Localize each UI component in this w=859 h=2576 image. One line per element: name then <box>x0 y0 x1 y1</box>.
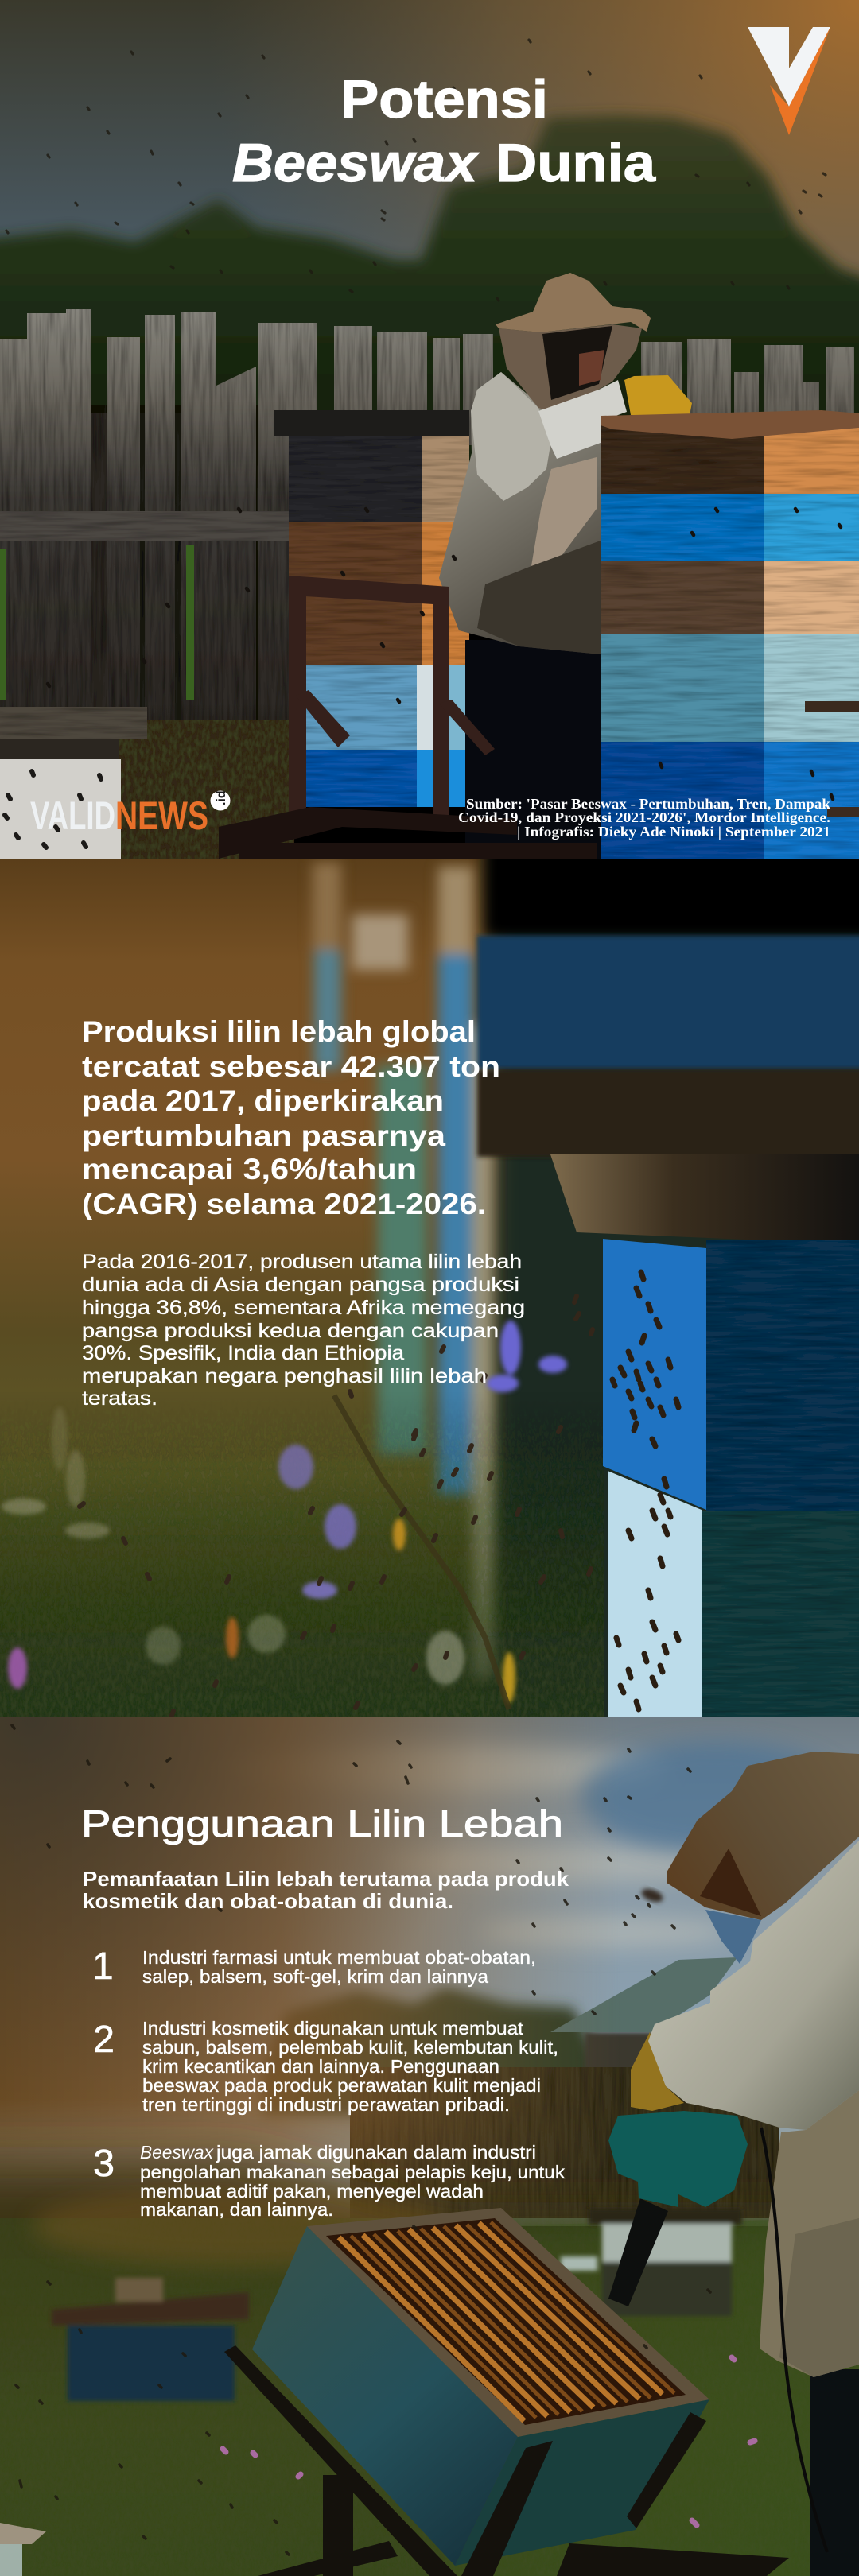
main statistic text: (CAGR) selama 2021-2026. <box>82 1188 486 1220</box>
raised sleeve <box>471 372 550 501</box>
bees in the sky and over the field <box>12 1725 710 2555</box>
sky background <box>0 0 859 280</box>
blue hive right face <box>706 1240 859 1511</box>
supporting paragraph: Pada 2016-2017, produsen utama lilin lebah <box>82 1251 522 1273</box>
title <box>232 69 656 193</box>
blue hive lit face <box>603 1239 706 1510</box>
list item 2: krim kecantikan dan lainnya. Penggunaan <box>142 2056 499 2077</box>
smoker nozzle <box>608 2198 668 2306</box>
supporting paragraph: dunia ada di Asia dengan pangsa produksi <box>82 1274 519 1296</box>
plant stem with bees <box>334 1395 509 1709</box>
farm building roof <box>550 1957 737 2032</box>
veil <box>705 1910 761 1964</box>
sunlit grass to the right <box>445 2218 859 2576</box>
rusty hive stand <box>219 576 597 859</box>
list item 3 <box>93 2142 566 2220</box>
supporting paragraph <box>82 1251 525 1410</box>
white glove sleeve <box>538 380 627 459</box>
blurred near bee <box>639 1887 665 1904</box>
hat <box>496 273 651 332</box>
upper coat and sleeve <box>648 1841 859 2130</box>
warm light overlay <box>0 1717 636 2322</box>
wooden fence background <box>350 2067 779 2218</box>
brown blurred band <box>477 1069 859 1157</box>
shadowed face <box>542 326 612 400</box>
veil <box>499 324 642 413</box>
top rim <box>307 2208 709 2437</box>
background hive left <box>52 2278 249 2401</box>
panel: hero section with beekeeper and hives <box>0 0 859 859</box>
top shading <box>0 1717 493 2163</box>
list item 2: sabun, balsem, pelembab kulit, kelembutan kulit, <box>142 2037 558 2058</box>
warm sun haze <box>285 0 859 281</box>
cloudy sky <box>0 1717 859 2226</box>
yellow glove <box>624 375 692 415</box>
supporting paragraph: merupakan negara penghasil lilin lebah <box>82 1365 487 1387</box>
dark frame cavity <box>326 2218 686 2425</box>
main statistic text: Produksi lilin lebah global <box>82 1015 476 1048</box>
list item 1: salep, balsem, soft-gel, krim dan lainnya <box>142 1966 488 1987</box>
right side panel <box>455 2399 709 2566</box>
small hive lower left <box>0 707 147 859</box>
stand legs <box>224 2345 789 2576</box>
green gaps in the fence <box>0 545 194 700</box>
grass texture <box>0 2218 859 2576</box>
Validnews.id logo: .id <box>215 790 228 805</box>
lower coat <box>760 2090 859 2377</box>
fence rail <box>0 511 289 541</box>
teal smoker body <box>608 2111 748 2207</box>
section intro: kosmetik dan obat-obatan di dunia. <box>83 1889 453 1913</box>
list item 2: 2 <box>93 2019 115 2061</box>
small box lower left <box>0 2523 46 2576</box>
main statistic text: mencapai 3,6%/tahun <box>82 1153 417 1185</box>
main statistic text: pertumbuhan pasarnya <box>82 1119 445 1152</box>
supporting paragraph: pangsa produksi kedua dengan cakupan <box>82 1320 499 1342</box>
main statistic text <box>82 1015 500 1220</box>
main statistic text: pada 2017, diperkirakan <box>82 1084 444 1117</box>
trousers <box>465 640 601 859</box>
bees in the air <box>6 40 826 301</box>
list item 2: tren tertinggi di industri perawatan pribadi. <box>142 2094 510 2115</box>
title: Dunia <box>496 133 656 193</box>
title: Beeswax <box>232 133 480 193</box>
Validnews.id logo: NEWS <box>115 793 208 838</box>
coat shadow <box>477 541 601 654</box>
bee cluster on hive <box>612 1272 678 1709</box>
icon: V brand mark <box>748 27 830 135</box>
hat <box>667 1752 859 1920</box>
beekeeper in veil and coat <box>439 273 692 859</box>
source credit: Covid-19, dan Proyeksi 2021-2026', Mordor Intelligence. <box>458 809 830 825</box>
list item 3: juga jamak digunakan dalam industri <box>216 2142 536 2163</box>
middle hive stack <box>274 410 469 807</box>
source credit: Sumber: 'Pasar Beeswax - Pertumbuhan, Tren, Dampak <box>466 796 830 812</box>
source credit <box>458 796 830 840</box>
dark blue sky corner <box>581 1741 851 1852</box>
right hive stack <box>601 410 859 859</box>
list item 3: 3 <box>93 2143 115 2185</box>
hive roof lid <box>550 1154 859 1244</box>
bees flying around flowers <box>80 1296 593 1717</box>
lower meadow darkening <box>0 1391 604 1717</box>
dark blue hive box blurred <box>477 936 859 1069</box>
blurred trees <box>262 1988 604 2115</box>
left side panel <box>252 2226 518 2566</box>
list item 3: Beeswax <box>140 2142 214 2163</box>
supporting paragraph: teratas. <box>82 1387 157 1410</box>
warm blurred background <box>0 859 859 1717</box>
Validnews.id logo: VALID <box>30 793 115 838</box>
bees on the hives <box>48 509 841 799</box>
dark shadow behind pillars <box>493 827 859 1749</box>
title: Potensi <box>340 69 548 130</box>
list item 2 <box>93 2018 558 2115</box>
wispy clouds <box>223 1745 764 1948</box>
list item 1: 1 <box>92 1946 114 1988</box>
blurred distant hive pillars <box>313 863 493 1678</box>
veil opening <box>700 1849 761 1916</box>
list item 2: beeswax pada produk perawatan kulit menjadi <box>142 2075 541 2096</box>
background hive right <box>561 2209 742 2316</box>
pale hive lower face <box>608 1471 702 1717</box>
Validnews.id logo <box>30 790 231 838</box>
wildflowers in the meadow <box>223 2357 755 2525</box>
list item 3: membuat aditif pakan, menyegel wadah <box>140 2181 484 2202</box>
coat <box>439 372 601 654</box>
section intro: Pemanfaatan Lilin lebah terutama pada produk <box>83 1867 569 1891</box>
list item 3: makanan, dan lainnya. <box>140 2199 333 2220</box>
cable <box>761 2128 827 2552</box>
supporting paragraph: 30%. Spesifik, India dan Ethiopia <box>82 1342 404 1364</box>
farm building wall <box>585 2032 775 2120</box>
lit chest <box>531 457 597 566</box>
panel: global production section <box>0 827 859 1749</box>
list item 1 <box>92 1946 536 1988</box>
list item 1: Industri farmasi untuk membuat obat-obatan, <box>142 1947 536 1968</box>
blurred wildflowers <box>2 1321 567 1703</box>
apron pocket <box>779 2218 859 2377</box>
supporting paragraph: hingga 36,8%, sementara Afrika memegang <box>82 1297 525 1319</box>
dry grass at fence base <box>119 720 294 859</box>
section intro <box>83 1867 569 1913</box>
list item 3: pengolahan makanan sebagai pelapis keju, untuk <box>140 2162 566 2182</box>
trousers <box>810 2369 859 2576</box>
main statistic text: tercatat sebesar 42.307 ton <box>82 1050 500 1083</box>
teal hive lower right face <box>702 1511 859 1717</box>
list item 2: Industri kosmetik digunakan untuk membuat <box>142 2018 524 2039</box>
yellow glove <box>631 2032 684 2111</box>
stand arms on right <box>461 2412 706 2576</box>
section heading: Penggunaan Lilin Lebah <box>81 1802 563 1845</box>
blurred treeline <box>0 115 859 477</box>
tilted hive with open frames <box>224 2208 789 2576</box>
panel: uses of beeswax section <box>0 1717 859 2576</box>
meadow ground <box>0 2163 859 2576</box>
black upper band <box>485 843 859 937</box>
foreground beekeeper <box>631 1752 859 2576</box>
honey frame highlights <box>351 2222 674 2418</box>
wooden fence <box>0 309 854 724</box>
source credit: | Infografis: Dieky Ade Ninoki | September 2021 <box>517 824 830 840</box>
golden glow over grass <box>32 2186 445 2266</box>
honey frames <box>339 2223 663 2421</box>
